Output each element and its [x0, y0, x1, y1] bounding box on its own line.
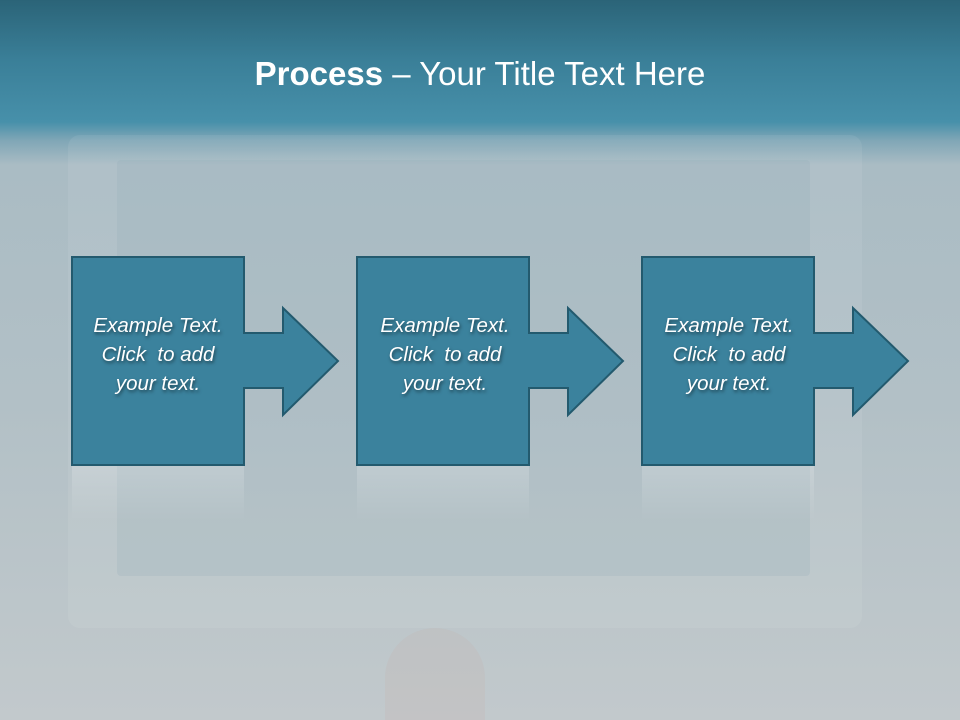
- finger: [385, 628, 485, 720]
- text block 1: Example Text.: [93, 314, 223, 337]
- text block 1: [93, 314, 223, 398]
- reflection 2: [357, 466, 529, 521]
- text block 3: [664, 314, 794, 398]
- text block 2: Example Text.: [380, 314, 510, 337]
- arrow 1: [72, 257, 338, 465]
- arrow 2: [357, 257, 623, 465]
- text block 1: Click to add: [102, 343, 214, 366]
- title: Process – Your Title Text Here: [255, 55, 705, 92]
- text block 2: your text.: [403, 372, 487, 395]
- reflection 1: [72, 466, 244, 521]
- arrow 3: [642, 257, 908, 465]
- tablet screen: [117, 160, 810, 576]
- text block 2: [380, 314, 510, 398]
- text block 3: Click to add: [673, 343, 785, 366]
- text block 3: your text.: [687, 372, 771, 395]
- text block 2: Click to add: [389, 343, 501, 366]
- reflection 3: [642, 466, 814, 521]
- background tablet: [68, 135, 862, 628]
- text block 1: your text.: [116, 372, 200, 395]
- text block 3: Example Text.: [664, 314, 794, 337]
